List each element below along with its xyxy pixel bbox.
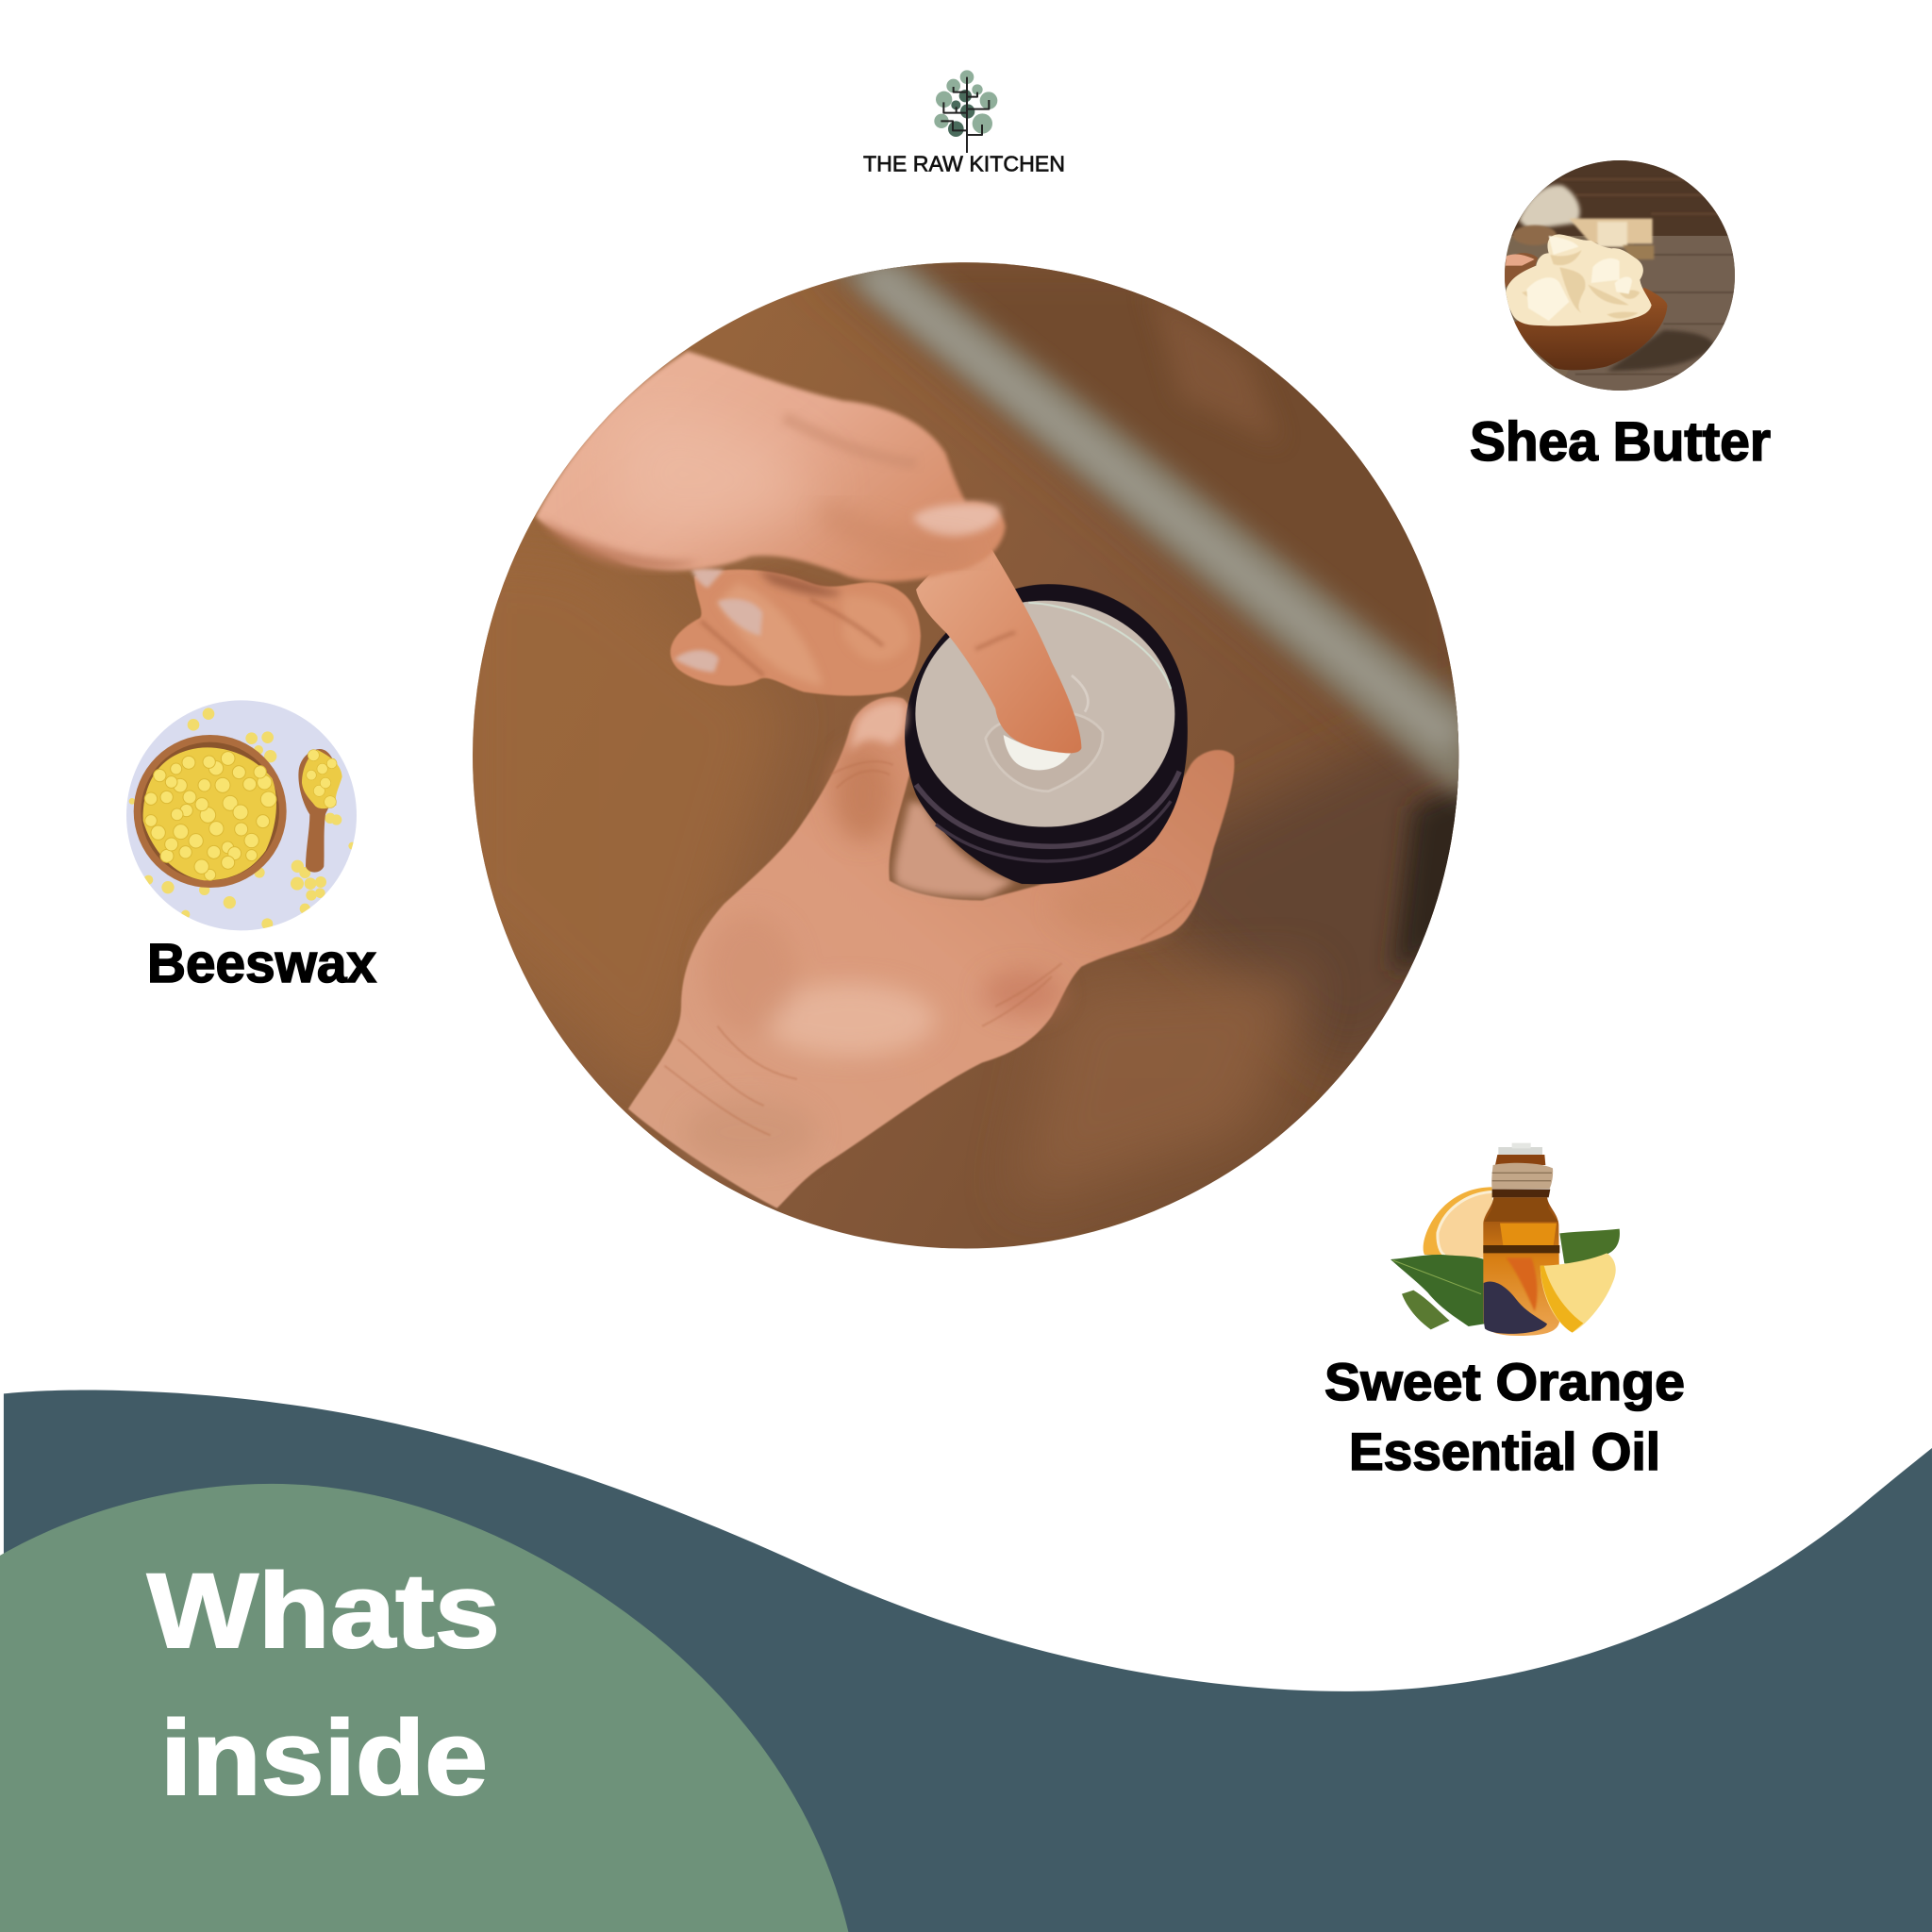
upper hand [536, 351, 1006, 581]
label: Sweet Orange Essential Oil: Sweet Orange [1324, 1352, 1685, 1411]
back leaf [1559, 1229, 1620, 1263]
label: Sweet Orange Essential Oil [1324, 1352, 1685, 1481]
ingredient: beeswax photo [123, 695, 361, 934]
wooden bowl [1512, 288, 1667, 370]
middle finger behind jar [894, 801, 1015, 897]
lower hand mottling [689, 747, 1066, 1164]
curled finger shading [718, 570, 909, 685]
label: Sweet Orange Essential Oil: Essential Oil [1349, 1422, 1660, 1481]
photo background [453, 245, 1485, 1277]
title: Whats inside: inside [160, 1699, 488, 1817]
upper hand highlights [628, 425, 808, 538]
logo: The Raw Kitchen [863, 70, 1065, 176]
front leaves [1391, 1255, 1484, 1326]
orange halves [1424, 1187, 1493, 1257]
finger creases [701, 599, 1015, 675]
palm lines [664, 761, 1191, 1136]
finger nails [675, 568, 762, 672]
lemon wedge [1541, 1253, 1616, 1333]
lower hand [628, 697, 1234, 1208]
cream jar [905, 584, 1188, 884]
knuckle shading [784, 417, 916, 463]
thumb shade of lower hand [850, 701, 906, 752]
logo tree icon [934, 70, 997, 153]
wax flakes in bowl [143, 747, 276, 880]
index finger [916, 548, 1081, 753]
loose beeswax flakes [129, 708, 356, 929]
curled fingers [671, 570, 921, 696]
shea butter pile [1506, 234, 1652, 326]
dark teal wave [4, 1391, 1932, 1932]
title: Whats inside: Whats [147, 1552, 500, 1670]
ingredient: sweet orange essential oil photo [1391, 1143, 1620, 1336]
label: Shea Butter: Shea Butter [1470, 411, 1771, 473]
upper hand lower shadow [539, 518, 698, 569]
main photo: hands and cream jar [453, 245, 1485, 1277]
glass bottle [1483, 1143, 1559, 1336]
wooden spoon [298, 749, 332, 873]
wooden bowl [134, 735, 287, 888]
green corner shape [0, 1484, 849, 1932]
label: Beeswax: Beeswax [147, 933, 376, 994]
blurred fingernail [913, 504, 1000, 537]
title: Whats inside [147, 1552, 500, 1817]
logo wordmark: THE RAW KITCHEN [863, 152, 1065, 176]
ingredient: shea butter photo [1500, 158, 1742, 396]
